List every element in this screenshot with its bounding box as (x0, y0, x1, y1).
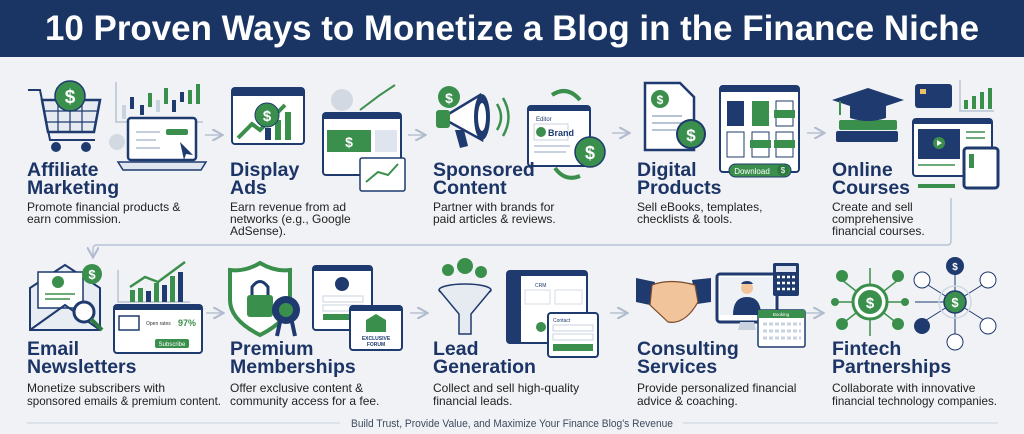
panel: fintech partnerships (831, 257, 997, 408)
panel: affiliate marketing (27, 81, 206, 226)
text block: comprehensive (832, 212, 914, 226)
text block: Collect and sell high-quality (433, 381, 579, 395)
text block: community access for a fee. (230, 394, 379, 408)
text block: Sell eBooks, templates, (637, 200, 762, 214)
footer tagline: Build Trust, Provide Value, and Maximize Your Finance Blog's Revenue (351, 418, 673, 430)
icon: megaphone and editor: $ (445, 90, 453, 106)
heading: Display (230, 159, 300, 181)
text block: advice & coaching. (637, 394, 738, 408)
heading: Newsletters (27, 356, 137, 378)
text block: sponsored emails & premium content. (27, 394, 221, 408)
icon: megaphone and editor (436, 86, 605, 178)
icon: network hub (831, 257, 996, 350)
icon: handshake, monitor, calculator, calendar (636, 263, 805, 347)
icon: document and files window: $ (657, 93, 664, 107)
text block: Offer exclusive content & (230, 381, 363, 395)
text block: Partner with brands for (433, 200, 554, 214)
heading: Sponsored (433, 159, 535, 181)
heading: Email (27, 338, 79, 360)
icon: network hub: $ (951, 295, 959, 310)
title: 10 Proven Ways to Monetize a Blog in the Finance Niche (45, 9, 979, 48)
text block: financial technology companies. (832, 394, 997, 408)
text block: Monetize subscribers with (27, 381, 165, 395)
arrow (206, 312, 222, 314)
icon: envelope, chart and subscribe window: Subscribe (159, 342, 186, 348)
text block: Earn revenue from ad (230, 200, 346, 214)
heading: Lead (433, 338, 479, 360)
heading: Content (433, 177, 507, 199)
icon: megaphone and editor: Brand (548, 128, 574, 138)
icon: shopping cart with chart and laptop: $ (65, 87, 76, 108)
text block: Provide personalized financial (637, 381, 796, 395)
icon: megaphone and editor: Editor (536, 117, 552, 123)
text block: financial courses. (832, 224, 925, 238)
heading: Products (637, 177, 722, 199)
text block: financial leads. (433, 394, 512, 408)
text block: checklists & tools. (637, 212, 732, 226)
icon: graduation cap, books and video window (832, 80, 998, 188)
heading: Online (832, 159, 893, 181)
title (0, 0, 1024, 57)
heading: Premium (230, 338, 313, 360)
icon: document and files window: Download (734, 167, 770, 176)
icon: document and files window (645, 83, 799, 177)
arrow (612, 132, 628, 134)
panel: online courses (832, 80, 998, 238)
icon: document and files window: $ (781, 166, 786, 175)
icon: envelope, chart and subscribe window (30, 262, 202, 353)
icon: ad windows with charts: $ (345, 134, 353, 150)
icon: megaphone and editor: $ (585, 143, 595, 163)
icon: funnel and CRM windows: CRM (535, 283, 546, 289)
heading: Digital (637, 159, 697, 181)
panel: email newsletters (27, 262, 221, 408)
icon: funnel and CRM windows (439, 258, 598, 357)
icon: shield, badge and login windows (230, 263, 402, 350)
heading: Ads (230, 177, 267, 199)
text block: networks (e.g., Google (230, 212, 351, 226)
panel: premium memberships (230, 263, 402, 408)
icon: shopping cart with chart and laptop (28, 81, 206, 170)
icon: handshake, monitor, calculator, calendar: Booking (773, 312, 790, 317)
connector arrow between rows (93, 198, 951, 256)
arrow (205, 134, 221, 136)
arrow (610, 312, 626, 314)
panel: sponsored content (433, 86, 605, 226)
arrow (408, 134, 424, 136)
icon: network hub: $ (952, 262, 958, 273)
icon: network hub: $ (866, 295, 875, 312)
heading: Courses (832, 177, 910, 199)
panel: digital products (637, 83, 799, 226)
text block: earn commission. (27, 212, 121, 226)
arrow (807, 132, 823, 134)
arrow (806, 312, 822, 314)
icon: shield, badge and login windows: EXCLUSIVE (362, 336, 391, 342)
icon: document and files window: $ (686, 126, 696, 145)
heading: Fintech (832, 338, 901, 360)
text block: Collaborate with innovative (832, 381, 976, 395)
icon: ad windows with charts (232, 85, 405, 191)
icon: funnel and CRM windows: Contact (553, 318, 571, 324)
icon: shield, badge and login windows: FORUM (367, 342, 385, 348)
icon: envelope, chart and subscribe window: Open rates (146, 321, 171, 327)
text block: Create and sell (832, 200, 913, 214)
heading: Partnerships (832, 356, 951, 378)
panel: display ads (230, 85, 405, 238)
heading: Affiliate (27, 159, 99, 181)
icon: envelope, chart and subscribe window: $ (88, 267, 96, 282)
text block: paid articles & reviews. (433, 212, 556, 226)
arrow (410, 312, 426, 314)
panel: consulting services (636, 263, 805, 408)
icon: ad windows with charts: $ (263, 108, 272, 125)
heading: Marketing (27, 177, 119, 199)
panel: lead generation (433, 258, 598, 408)
text block: AdSense). (230, 224, 286, 238)
heading: Services (637, 356, 717, 378)
heading: Memberships (230, 356, 356, 378)
heading: Consulting (637, 338, 739, 360)
icon: envelope, chart and subscribe window: 97% (178, 318, 196, 328)
heading: Generation (433, 356, 536, 378)
text block: Promote financial products & (27, 200, 180, 214)
